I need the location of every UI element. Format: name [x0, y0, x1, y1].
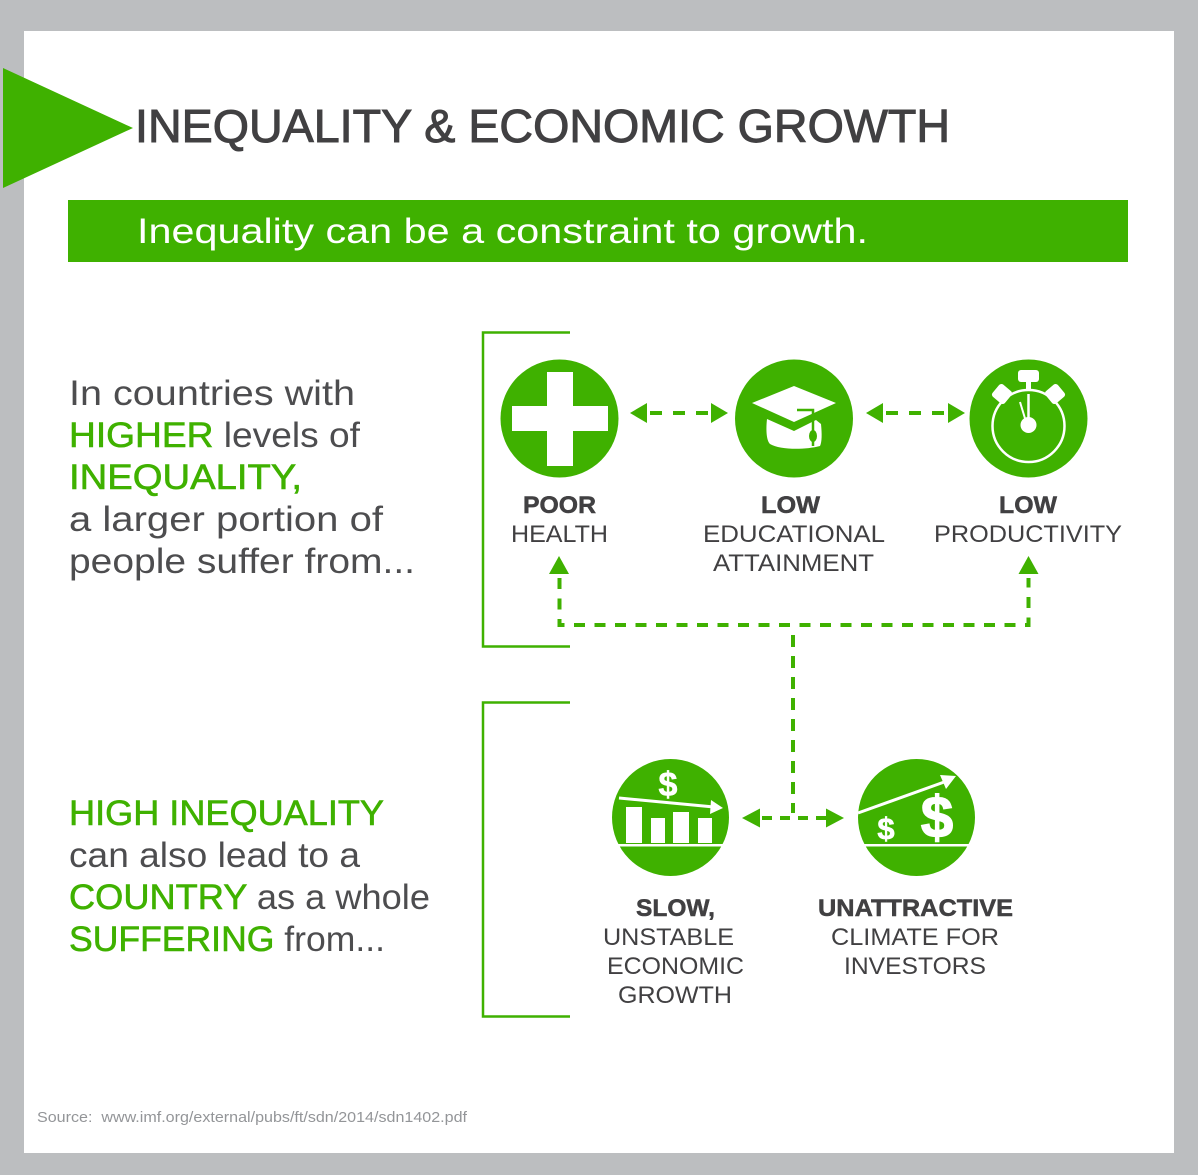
icon: health cross: [500, 360, 618, 478]
arrow: growth to investors: [742, 808, 844, 828]
label: unattractive climate for investors: UNATTRACTIVE: [818, 895, 1013, 922]
bracket: bottom: [483, 702, 570, 1016]
text block: high inequality country: [69, 794, 430, 959]
label: low educational attainment: LOW: [761, 492, 820, 519]
icon: title triangle: [3, 68, 133, 188]
label: slow unstable economic growth: [603, 895, 744, 1009]
text block: higher inequality: people suffer from...: [69, 542, 415, 581]
arrow: health to education: [630, 403, 728, 423]
text block: higher inequality: INEQUALITY,: [69, 458, 302, 497]
label: low educational attainment: ATTAINMENT: [713, 550, 874, 577]
text block: higher inequality: In countries with: [69, 374, 355, 413]
banner: Inequality can be a constraint to growth.: [137, 212, 868, 251]
icon: falling bars: [612, 759, 729, 876]
banner: [68, 200, 1128, 262]
text block: high inequality country: COUNTRY as a whole: [69, 878, 430, 917]
label: poor health: POOR: [523, 492, 596, 519]
label: low educational attainment: EDUCATIONAL: [703, 521, 885, 548]
label: unattractive climate for investors: CLIMATE FOR: [831, 924, 999, 951]
label: low productivity: PRODUCTIVITY: [934, 521, 1122, 548]
text block: higher inequality: HIGHER levels of: [69, 416, 360, 455]
text block: high inequality country: can also lead to a: [69, 836, 361, 875]
label: slow unstable economic growth: UNSTABLE: [603, 924, 734, 951]
label: low productivity: [934, 492, 1122, 548]
icon: rising dollars: $: [877, 811, 895, 846]
text block: higher inequality: a larger portion of: [69, 500, 383, 539]
arrow: dashed connector to top outcomes: [549, 556, 1038, 813]
text block: high inequality country: HIGH INEQUALITY: [69, 794, 384, 833]
label: slow unstable economic growth: GROWTH: [618, 982, 732, 1009]
label: slow unstable economic growth: SLOW,: [636, 895, 715, 922]
text block: higher inequality: [69, 374, 415, 581]
icon: falling bars: $: [659, 766, 678, 804]
text block: high inequality country: SUFFERING from...: [69, 920, 385, 959]
icon: rising dollars: $: [921, 785, 953, 850]
title: INEQUALITY & ECONOMIC GROWTH: [135, 100, 950, 152]
label: poor health: HEALTH: [511, 521, 608, 548]
label: unattractive climate for investors: INVESTORS: [844, 953, 986, 980]
label: poor health: [511, 492, 608, 548]
icon: stopwatch: [970, 360, 1088, 478]
bracket: top: [483, 332, 570, 646]
label: low productivity: LOW: [999, 492, 1057, 519]
label: unattractive climate for investors: [818, 895, 1013, 980]
label: slow unstable economic growth: ECONOMIC: [607, 953, 744, 980]
icon: rising dollars: [858, 759, 975, 876]
arrow: education to productivity: [866, 403, 965, 423]
label: low educational attainment: [703, 492, 885, 577]
source note: Source: www.imf.org/external/pubs/ft/sdn/2014/sdn1402.pdf: [37, 1109, 468, 1126]
icon: graduation cap: [735, 360, 853, 478]
